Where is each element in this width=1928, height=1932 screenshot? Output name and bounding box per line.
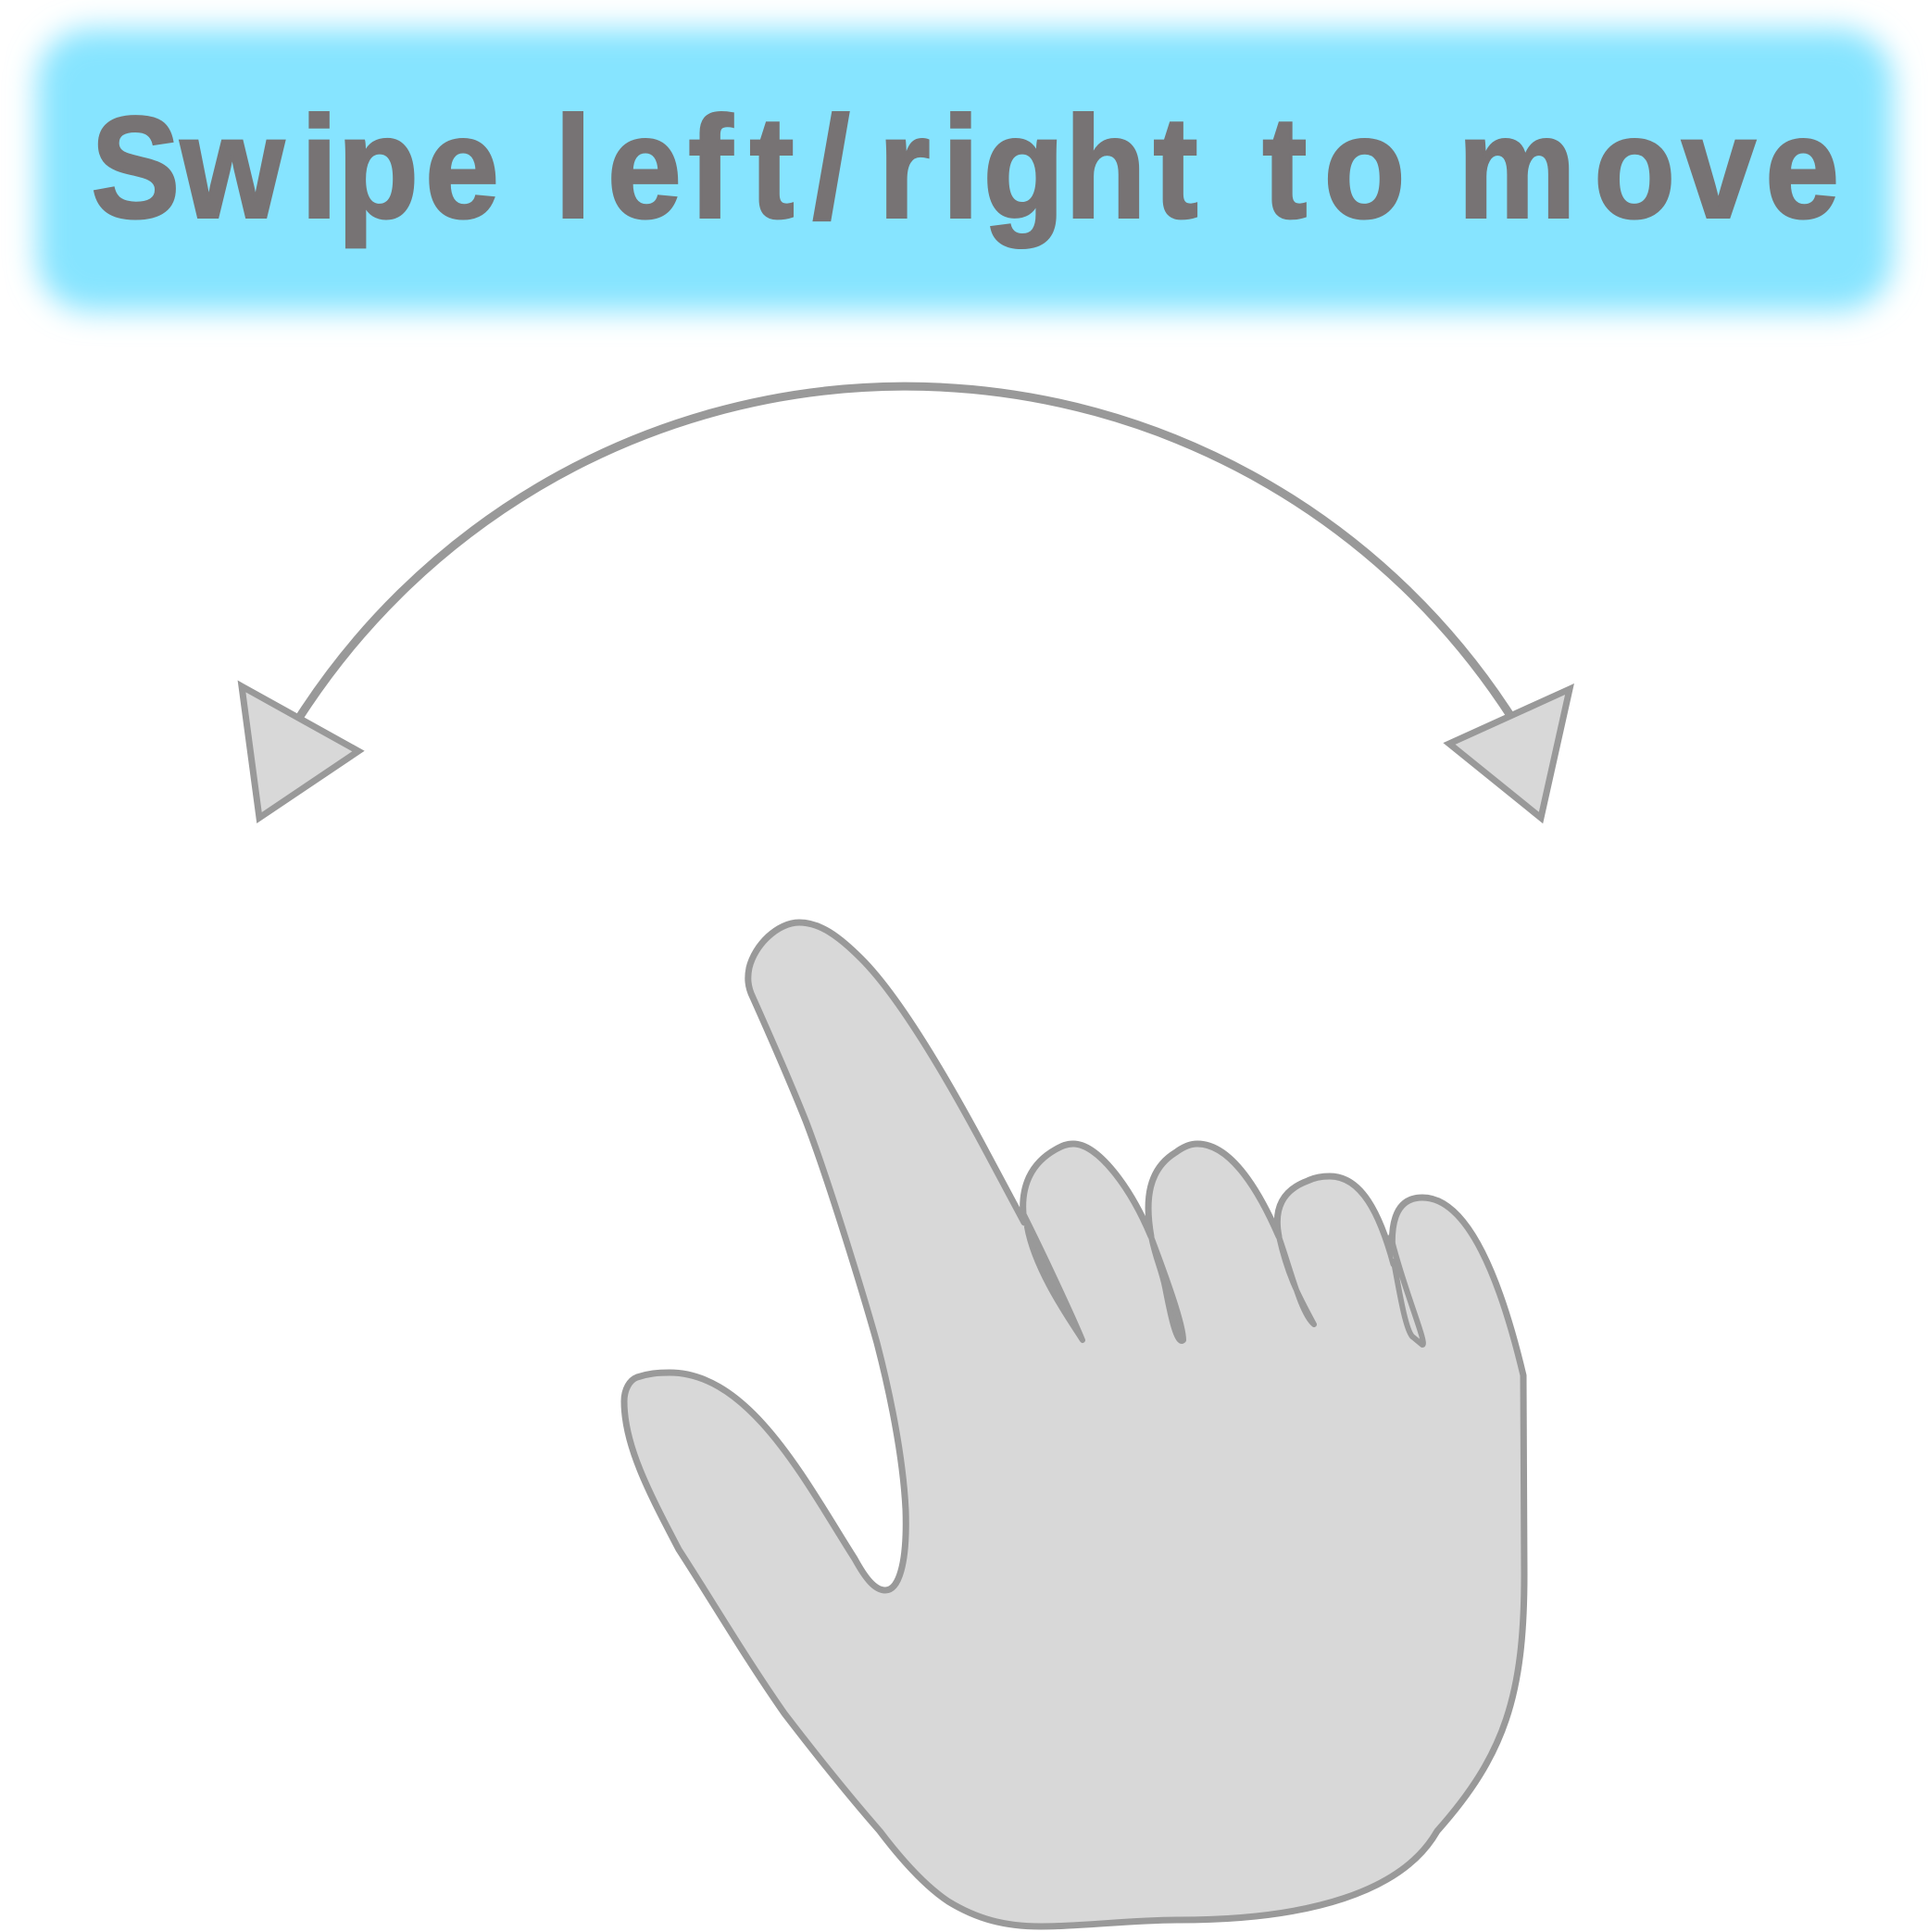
- arrow: curved double-headed swipe arc: [242, 386, 1570, 818]
- hand silhouette: [624, 922, 1524, 1926]
- finger crease: middle and ring: [1151, 1236, 1183, 1341]
- finger crease: ring and third: [1279, 1236, 1314, 1324]
- banner: blurred blue background: [37, 29, 1893, 311]
- icon: pointing hand: [624, 922, 1524, 1926]
- finger crease: index and middle: [1024, 1215, 1083, 1340]
- arc line: [299, 386, 1509, 718]
- finger crease: third and little: [1391, 1236, 1423, 1345]
- arrowhead: left: [242, 686, 358, 818]
- title: Swipe left/right to move: [91, 86, 1839, 248]
- arrowhead: right: [1449, 689, 1570, 818]
